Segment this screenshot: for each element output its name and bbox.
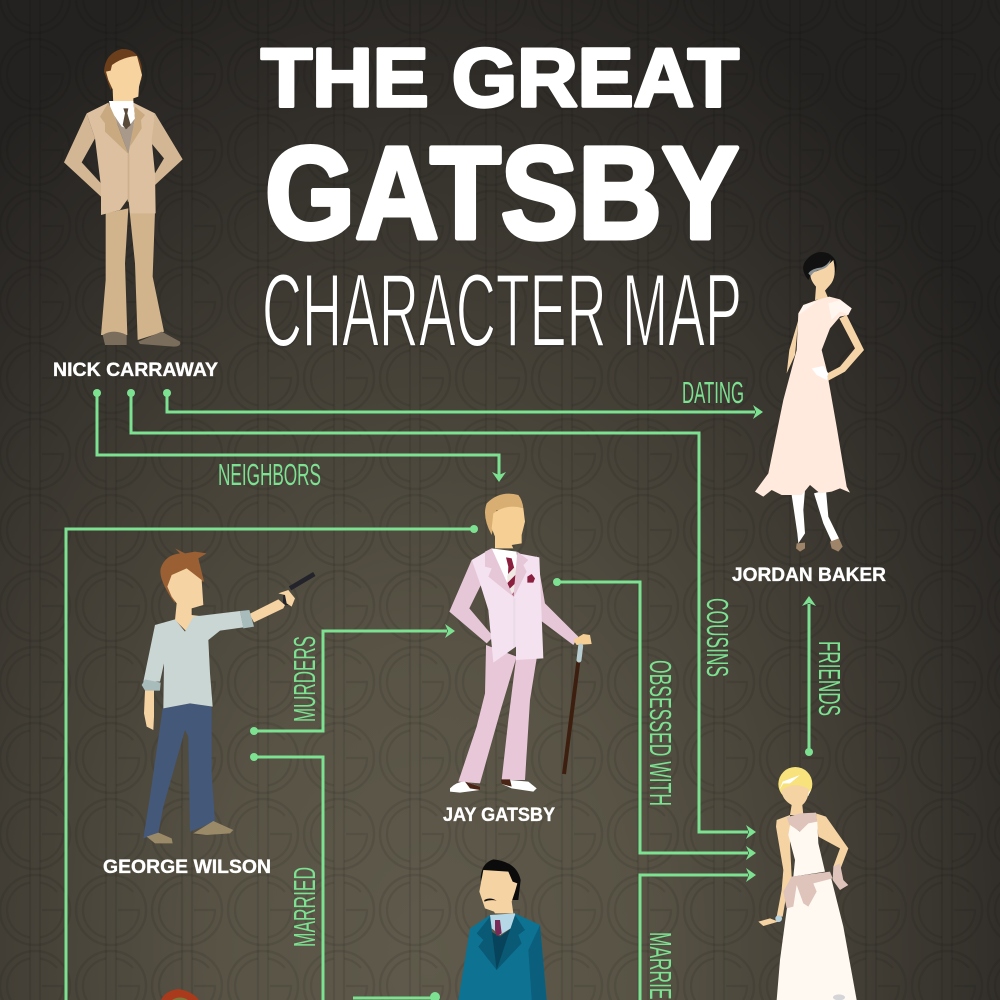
connector: nick to jordan, dating	[163, 389, 763, 419]
connector: tom stub	[353, 992, 440, 1000]
character: george wilson	[142, 548, 314, 843]
title line: the great: THE GREAT	[261, 31, 739, 124]
connector: gatsby to lower-left character	[66, 525, 478, 1000]
character: daisy buchanan	[758, 767, 857, 1000]
connector: nick to gatsby, neighbors	[93, 389, 506, 482]
character: jay gatsby	[449, 494, 592, 793]
character: tom buchanan	[458, 859, 547, 1000]
connector: tom to daisy, married	[640, 868, 756, 1000]
label: cousins: COUSINS	[700, 598, 735, 677]
label: obsessed with: OBSESSED WITH	[643, 660, 678, 806]
connector: george to gatsby, murders	[250, 624, 455, 735]
label: murders: MURDERS	[287, 636, 322, 722]
name: jordan baker: JORDAN BAKER	[732, 564, 886, 586]
title line: gatsby: GATSBY	[265, 119, 739, 266]
character: nick carraway	[64, 49, 183, 347]
connector: george to myrtle, married	[250, 753, 323, 1000]
name: nick carraway: NICK CARRAWAY	[53, 359, 218, 381]
connector: daisy to jordan, friends	[802, 596, 816, 756]
connector: nick to daisy, cousins	[127, 389, 756, 839]
label: married, george: MARRIED	[287, 867, 322, 947]
label: dating: DATING	[682, 375, 744, 410]
name: jay gatsby: JAY GATSBY	[443, 804, 555, 826]
title	[261, 31, 742, 369]
label: friends: FRIENDS	[812, 641, 847, 716]
name: george wilson: GEORGE WILSON	[103, 856, 271, 878]
label: neighbors: NEIGHBORS	[218, 457, 321, 492]
character: jordan baker	[755, 252, 864, 552]
connector: gatsby to daisy, obsessed with	[553, 578, 756, 860]
character: myrtle wilson, hair	[161, 989, 199, 1000]
